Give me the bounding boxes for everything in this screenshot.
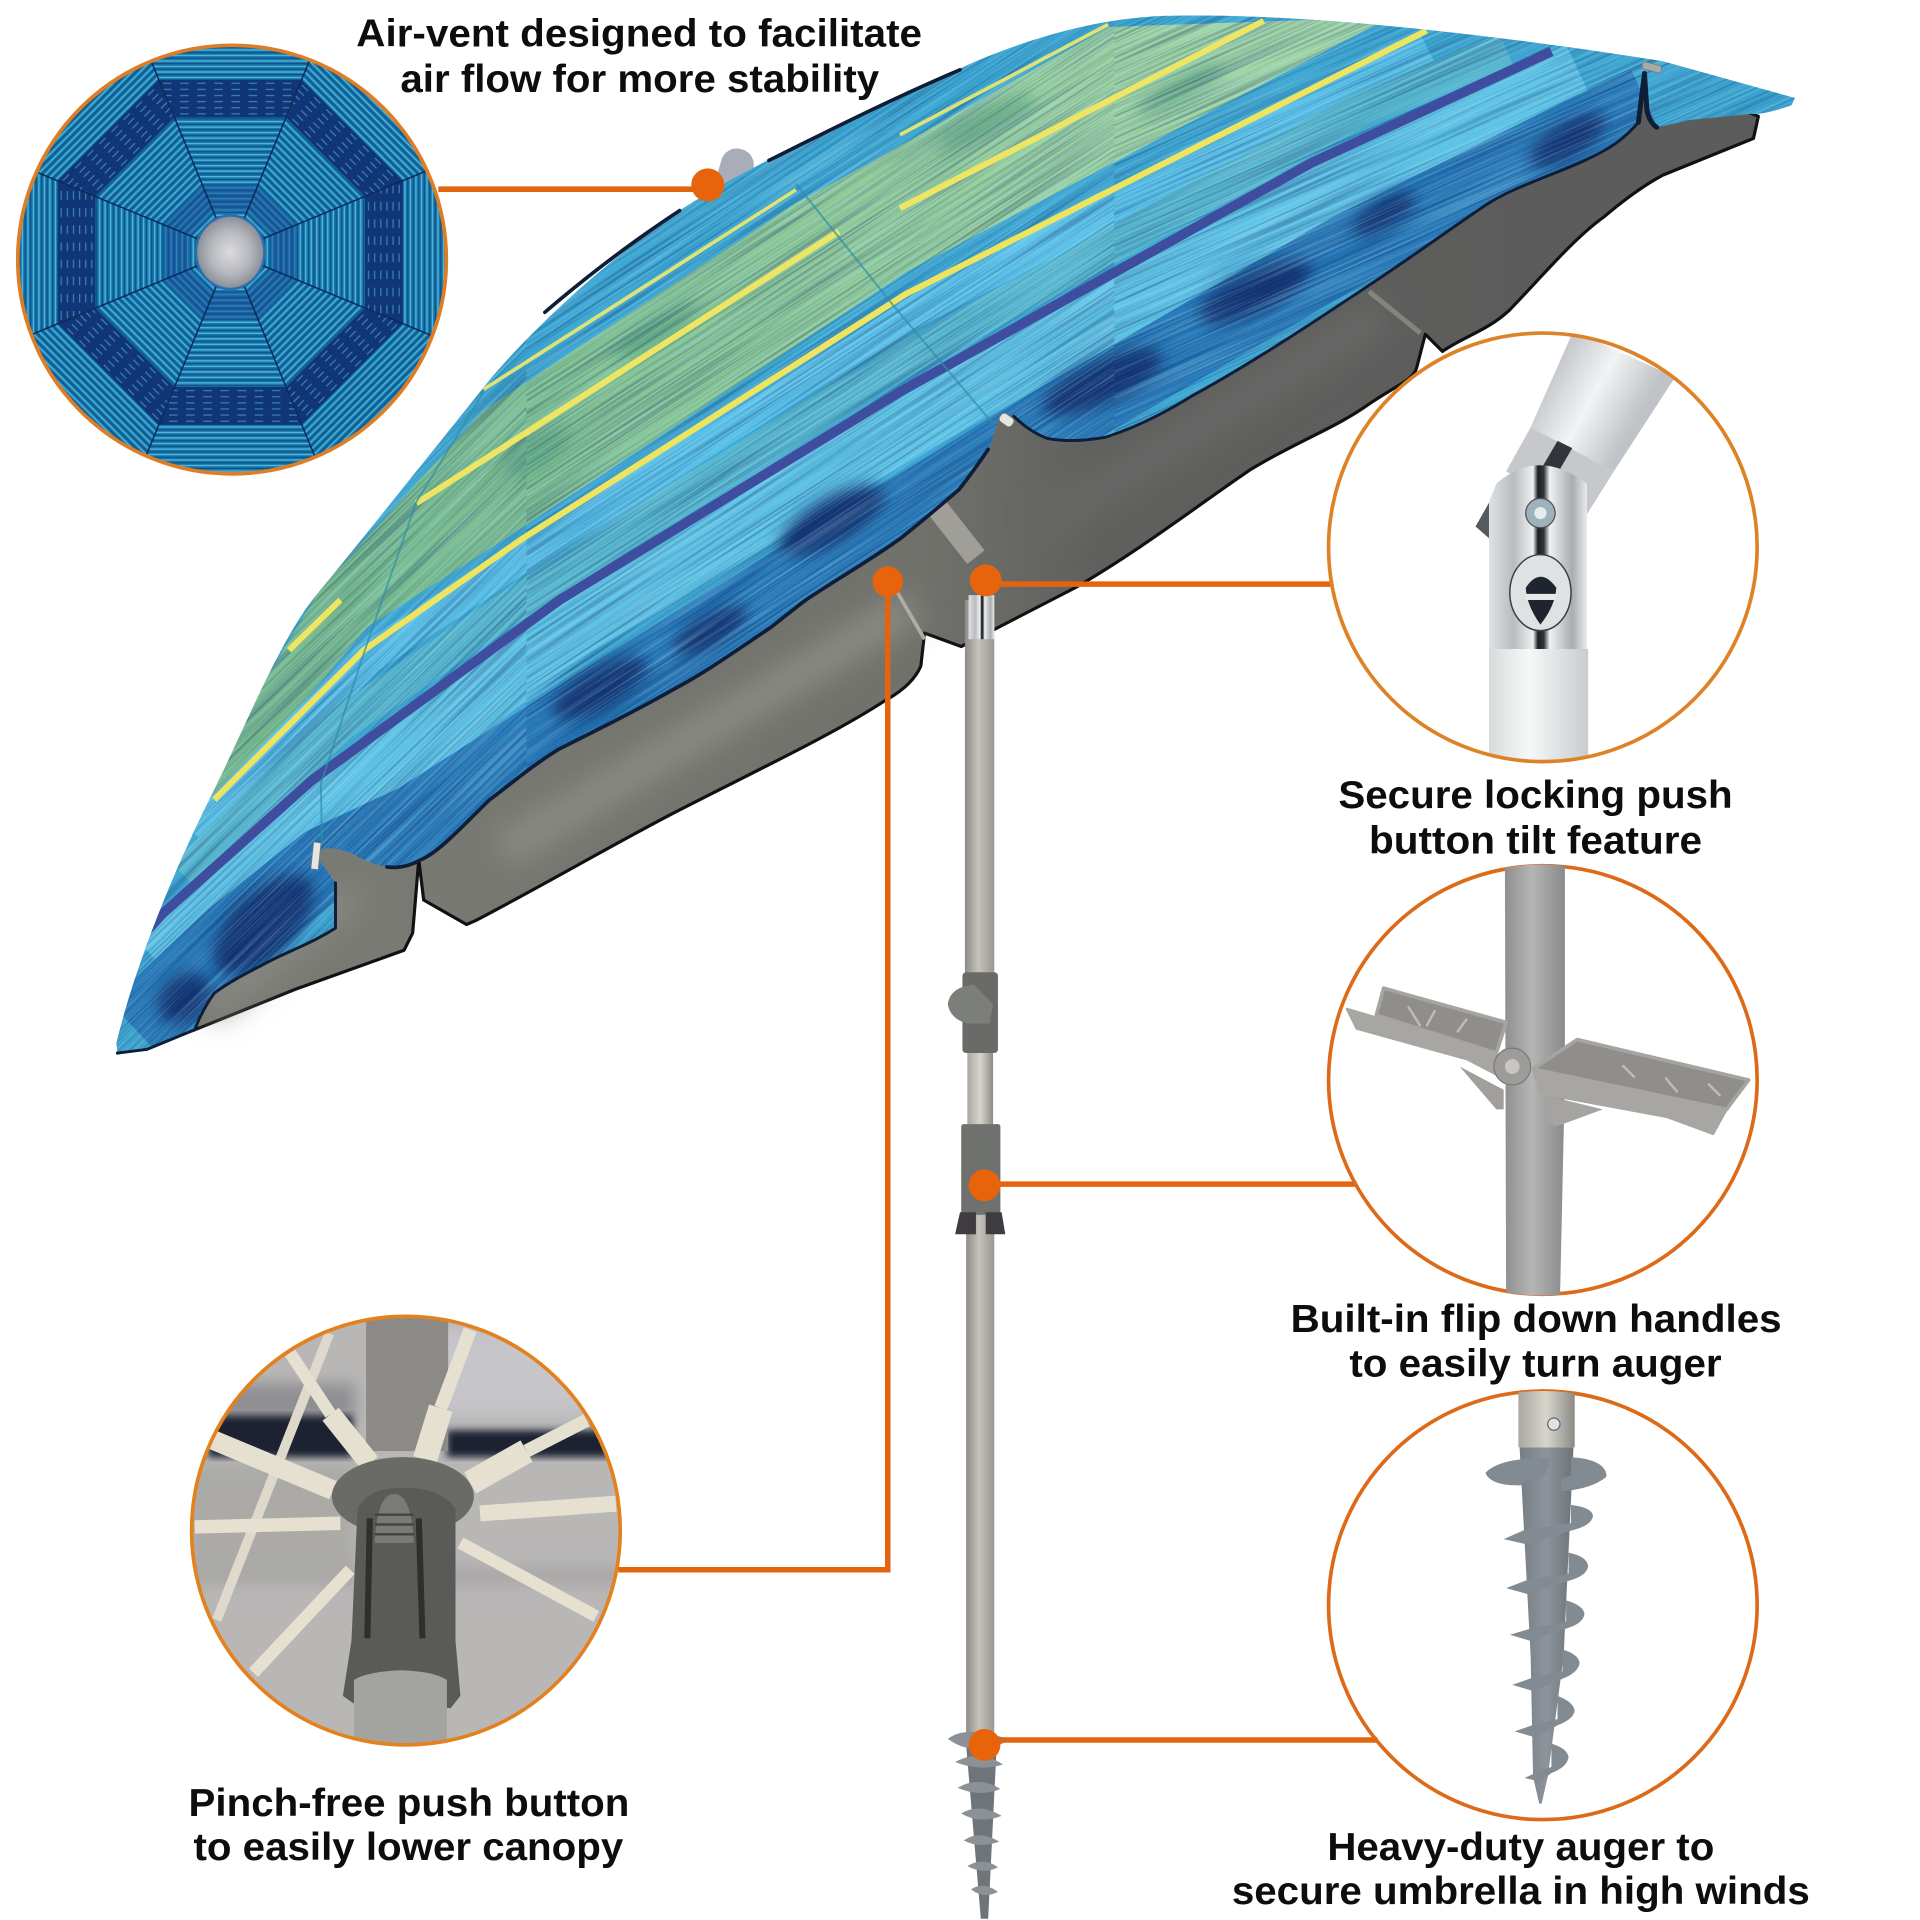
callout lines [438, 189, 1378, 1740]
heading: air vent: air flow for more stability [400, 58, 879, 101]
lower light blue band [157, 73, 1580, 961]
underside fold highlights [208, 312, 1384, 1010]
push button [1510, 555, 1571, 631]
canopy ribs and stretcher [884, 291, 1420, 639]
panel: push button detail circle [184, 1310, 637, 1751]
hub [332, 1457, 474, 1536]
lower pole [354, 1670, 447, 1751]
heading: tilt: button tilt feature [1369, 819, 1702, 862]
dark tie-dye blotches [147, 103, 1614, 1034]
panel: handles detail circle [1329, 862, 1757, 1298]
green mottling [501, 55, 1230, 483]
vent knob [195, 214, 266, 290]
heading: air vent: Air-vent designed to facilitate [356, 13, 922, 56]
chrome band [1506, 427, 1614, 514]
auger tube [1518, 1389, 1575, 1447]
tilt knob sleeve [948, 972, 998, 1053]
heading: handles: to easily turn auger [1349, 1342, 1722, 1385]
heading: handles: Built-in flip down handles [1291, 1298, 1782, 1341]
tilted upper tube [1531, 331, 1675, 471]
handle collar [955, 1124, 1005, 1234]
upper pole shaft [965, 600, 994, 1004]
pole [948, 595, 1010, 1919]
panel: air vent detail circle [16, 44, 448, 476]
pivot [1494, 1048, 1531, 1085]
ribs [195, 1330, 616, 1673]
heading: push button: Pinch-free push button [189, 1782, 629, 1825]
shaft [1505, 862, 1565, 1298]
woven streak texture [116, 16, 1795, 1052]
right handle [1533, 1040, 1749, 1134]
tilt joint [969, 595, 994, 639]
rib end tips [311, 61, 1662, 870]
canopy underside [118, 73, 1758, 1053]
panel: tilt mechanism detail circle [1329, 331, 1757, 765]
left handle [1347, 988, 1506, 1109]
lower dark blue band [135, 104, 1647, 1029]
yellow stripes [214, 21, 1427, 800]
heading: tilt: Secure locking push [1338, 774, 1733, 817]
dark canopy edge [208, 1416, 631, 1457]
light blue band under green [196, 47, 1427, 835]
callout dots [691, 168, 1002, 1761]
ground auger [948, 1732, 1010, 1919]
upper pole [366, 1310, 448, 1451]
middle pole shaft [967, 1047, 993, 1139]
auger shaft [1520, 1447, 1573, 1804]
heading: auger: secure umbrella in high winds [1232, 1870, 1810, 1913]
panel seams [321, 184, 992, 845]
panel: auger detail circle [1329, 1389, 1757, 1820]
teal band above purple stripe [184, 49, 1506, 876]
sleeve [343, 1488, 460, 1708]
air vent knob on canopy [714, 145, 758, 196]
canopy underside tones [184, 1329, 637, 1584]
push button clip [367, 1494, 422, 1638]
green band [192, 20, 1376, 834]
heading: push button: to easily lower canopy [193, 1826, 623, 1869]
lower tube [1489, 649, 1588, 765]
canopy printed fabric [116, 16, 1795, 1052]
purple stripe [147, 51, 1551, 931]
canopy edge piping [118, 70, 1657, 1053]
chrome joint [1476, 490, 1504, 551]
lower pole shaft [966, 1206, 994, 1745]
heading: auger: Heavy-duty auger to [1327, 1826, 1714, 1869]
auger blades [1485, 1457, 1607, 1782]
